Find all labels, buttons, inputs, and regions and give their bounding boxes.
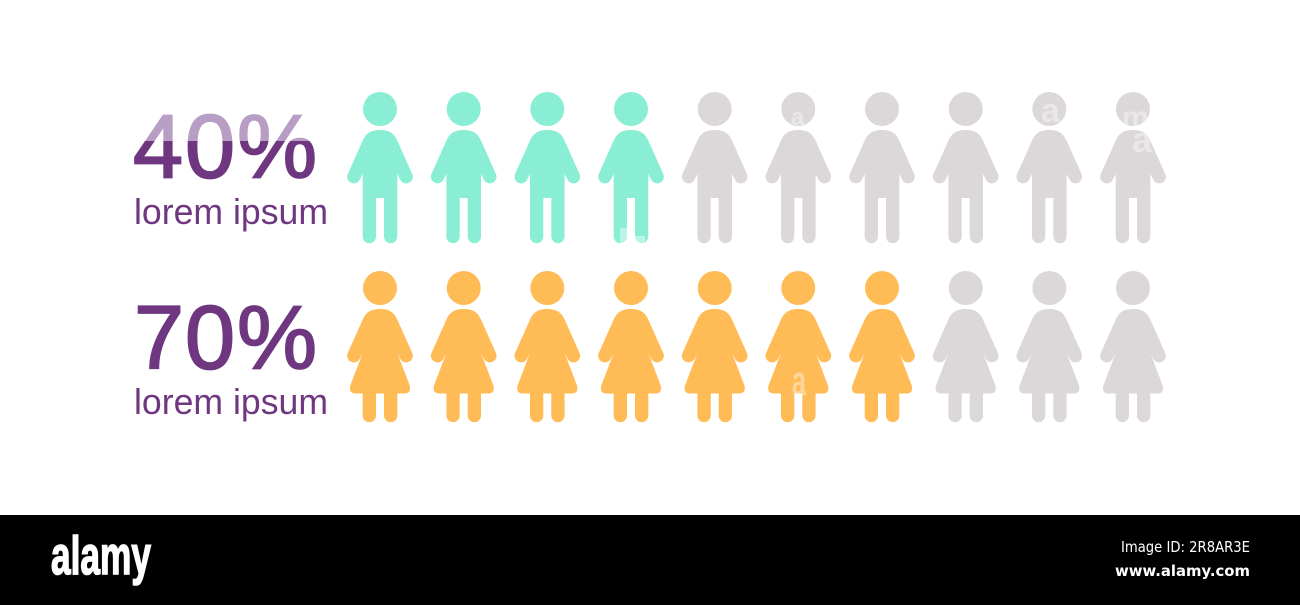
icon: woman grey 9 [1016, 271, 1082, 422]
icon: woman highlighted 4 [598, 271, 664, 422]
watermark traces: a [791, 104, 805, 131]
icon: man grey 5 [682, 92, 748, 243]
icon: man highlighted 3 [514, 92, 580, 243]
icon: woman grey 10 [1100, 271, 1166, 422]
watermark traces: a [1132, 119, 1153, 160]
watermark traces: a [1041, 92, 1061, 130]
icon: man grey 7 [849, 92, 915, 243]
row 2: female pictogram, 7 of 10 highlighted [347, 271, 1166, 422]
icon: woman highlighted 2 [431, 271, 497, 422]
icon: woman highlighted 5 [682, 271, 748, 422]
watermark traces: m [1122, 101, 1149, 134]
icon: man grey 9 [1016, 92, 1082, 243]
icon: woman highlighted 3 [514, 271, 580, 422]
icon: woman highlighted 6 [765, 271, 831, 422]
icon: woman grey 8 [933, 271, 999, 422]
figure: 40 percent: 40% [133, 98, 317, 198]
icon: man highlighted 2 [431, 92, 497, 243]
figure: 40 percent: 40% [133, 98, 317, 198]
caption: lorem ipsum: lorem ipsum [134, 381, 328, 422]
row 1: male pictogram, 4 of 10 highlighted [347, 92, 1166, 243]
footer bar [0, 515, 1300, 605]
figure: 40 percent [134, 114, 315, 180]
watermark traces: a [792, 357, 806, 404]
row 2: 70% label [134, 288, 328, 422]
watermark traces [620, 92, 1153, 404]
logo: alamy: alamy [51, 526, 151, 586]
website: www.alamy.com [1115, 562, 1250, 580]
icon: man highlighted 1 [347, 92, 413, 243]
image id: Image ID: 2R8AR3E [1121, 538, 1250, 556]
icon: man grey 8 [933, 92, 999, 243]
icon: man grey 6 [765, 92, 831, 243]
row 1: 40% label [134, 114, 326, 232]
caption: lorem ipsum: lorem ipsum [134, 191, 328, 232]
figure: 70 percent: 70% [134, 288, 317, 388]
icon: woman highlighted 7 [849, 271, 915, 422]
icon: man highlighted 4 [598, 92, 664, 243]
icon: man grey 10 [1100, 92, 1166, 243]
icon: woman highlighted 1 [347, 271, 413, 422]
